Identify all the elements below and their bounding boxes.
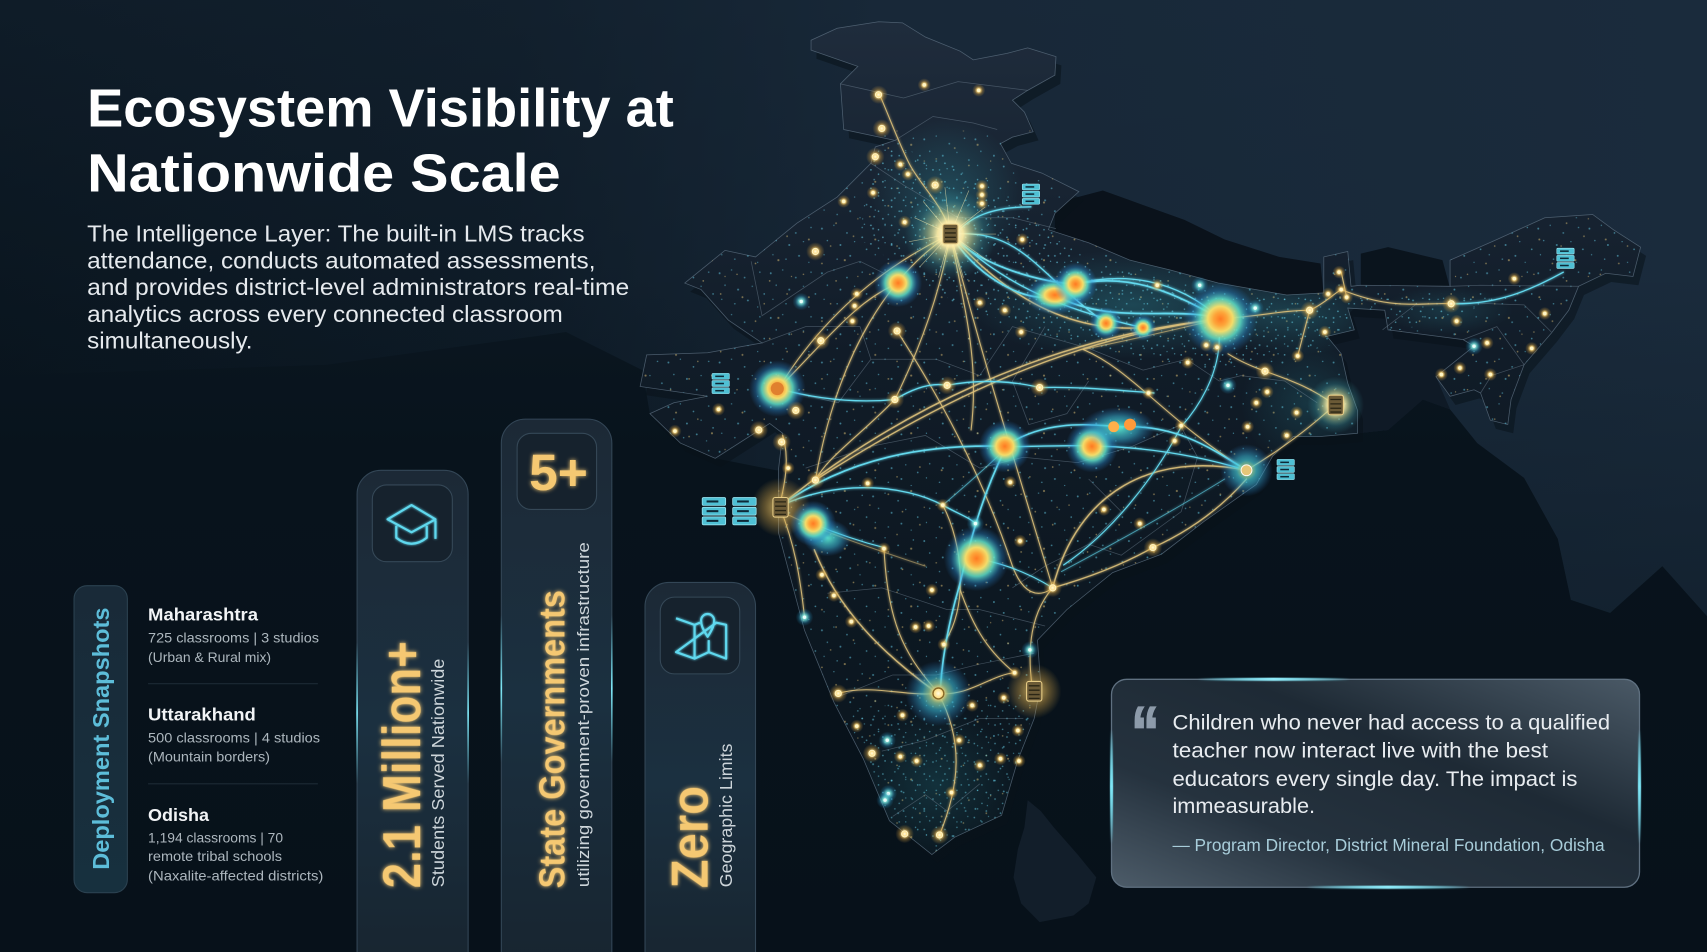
- panel: 5+ state governments: [501, 419, 612, 952]
- stat caption: Students Served Nationwide: [428, 659, 448, 887]
- Bhutan dark region: [1361, 247, 1450, 288]
- quote text: teacher now interact live with the best: [1172, 740, 1548, 763]
- intro paragraph: analytics across every connected classroom: [87, 301, 563, 327]
- server icons: [702, 184, 1574, 525]
- intro paragraph: simultaneously.: [87, 327, 253, 353]
- snapshot: Odisha: remote tribal schools: [148, 848, 282, 864]
- snapshot: Odisha: [148, 805, 323, 884]
- hub: Patna: [1183, 282, 1257, 356]
- snapshot: Odisha: Odisha: [148, 805, 209, 825]
- quote text: immeasurable.: [1172, 795, 1315, 818]
- quote text: [1172, 711, 1610, 818]
- snapshot label pill: Deployment Snapshots: [88, 607, 114, 870]
- gold network links: [778, 95, 1451, 835]
- snapshot: Uttarakhand: Uttarakhand: [148, 705, 256, 725]
- intro paragraph: The Intelligence Layer: The built-in LMS tracks: [87, 221, 585, 247]
- icon: map with pin: [660, 597, 740, 674]
- map of India: [631, 22, 1655, 871]
- snapshot: Maharashtra: [148, 605, 319, 665]
- intro paragraph: attendance, conducts automated assessments,: [87, 247, 595, 273]
- nodes: teal points: [793, 277, 1483, 809]
- hub: central east: [1066, 420, 1118, 472]
- hub: Delhi data centre: [905, 187, 996, 280]
- snapshot: Maharashtra: 725 classrooms | 3 studios: [148, 629, 319, 645]
- quote attribution: — Program Director, District Mineral Foundation, Odisha: [1172, 835, 1605, 855]
- settlement dots and light wash: [631, 120, 1655, 871]
- snapshot: Uttarakhand: 500 classrooms | 4 studios: [148, 729, 320, 745]
- hub: Gujarat: [749, 360, 806, 417]
- hub: Bengaluru: [906, 661, 971, 726]
- hub: Hyderabad heat spot: [944, 526, 1009, 591]
- hub: Chhattisgarh pair: [1081, 407, 1155, 449]
- stat: State Governments: State Governments: [531, 590, 572, 888]
- teal network links: [778, 207, 1563, 686]
- Bangladesh region: [1327, 308, 1474, 433]
- stat box: 5+: 5+: [529, 444, 588, 501]
- icon: graduation cap: [372, 485, 452, 562]
- Sri Lanka landmass: [1014, 800, 1096, 922]
- title: [87, 79, 674, 204]
- snapshot label pill: [74, 586, 127, 893]
- India landmass: [640, 22, 1641, 855]
- hub: Chennai data centre: [1007, 664, 1061, 718]
- hub: Lucknow pair: [1024, 262, 1097, 315]
- snapshot: Uttarakhand: [148, 705, 320, 764]
- hub: Kolkata data centre: [1307, 377, 1364, 433]
- panel: testimonial quote: [1110, 678, 1641, 889]
- state borders: [751, 82, 1579, 816]
- panel: deployment snapshots: [74, 586, 323, 893]
- intro paragraph: [87, 221, 629, 353]
- intro paragraph: and provides district-level administrators real-time: [87, 274, 629, 300]
- stat caption: utilizing government-proven infrastructure: [575, 542, 593, 887]
- stat caption: Geographic Limits: [716, 743, 736, 887]
- hub: north Rajasthan heat spot: [874, 259, 922, 307]
- stat: Zero: Zero: [662, 786, 720, 888]
- quote text: educators every single day. The impact is: [1172, 768, 1577, 791]
- hub: Nagpur: [979, 420, 1031, 472]
- snapshot: Uttarakhand: (Mountain borders): [148, 748, 270, 764]
- hub: Mumbai data centre: [751, 478, 810, 537]
- snapshot: Odisha: (Naxalite-affected districts): [148, 868, 323, 884]
- background: surrounding land: [0, 0, 1707, 616]
- map shadow: [646, 30, 1646, 863]
- hub: Odisha: [1220, 444, 1273, 496]
- stat box: 5+: [517, 433, 597, 509]
- quote mark: “: [1131, 693, 1159, 773]
- panel: 2.1 million students: [357, 470, 468, 952]
- title: Nationwide Scale: [87, 145, 561, 204]
- hub: Pune heat spot: [790, 501, 851, 556]
- stat: 2.1 Million+: 2.1 Million+: [373, 641, 432, 888]
- quote text: Children who never had access to a qualified: [1172, 711, 1610, 734]
- panel: zero geographic limits: [645, 582, 756, 952]
- nodes: small gold points: [668, 78, 1551, 799]
- Nepal dark region: [1055, 191, 1324, 299]
- hub: Uttar Pradesh heat spots: [1090, 307, 1156, 341]
- snapshot: Maharashtra: Maharashtra: [148, 605, 258, 625]
- snapshot: Maharashtra: (Urban & Rural mix): [148, 649, 271, 665]
- snapshot: Odisha: 1,194 classrooms | 70: [148, 830, 283, 846]
- title: Ecosystem Visibility at: [87, 79, 674, 138]
- hubs and glow nodes: [668, 78, 1551, 844]
- nodes: gold rings: [750, 85, 1460, 844]
